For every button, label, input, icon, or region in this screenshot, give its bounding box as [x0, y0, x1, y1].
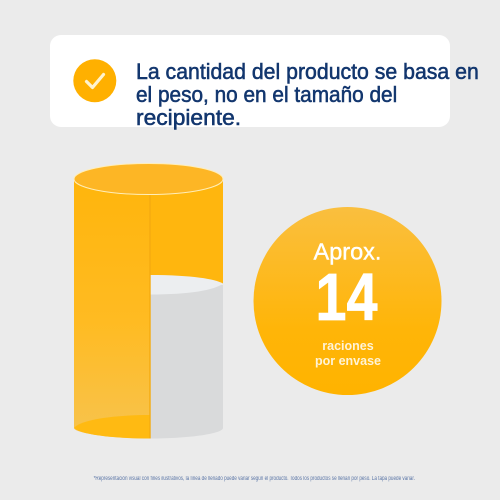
heading: weight statement: La cantidad del producto se basa en — [136, 59, 479, 84]
cylinder: gray product level — [150, 275, 223, 438]
cylinder: top lid — [74, 164, 223, 194]
label: approx: Aprox. — [314, 238, 381, 264]
heading: weight statement: recipiente. — [136, 105, 241, 130]
cylinder: center seam — [149, 194, 151, 438]
heading: weight statement — [136, 59, 479, 130]
label: per container: por envase — [315, 354, 381, 368]
cylinder: base ellipse — [74, 415, 150, 438]
footnote: *Representación visual con fines ilustrativos, la línea de llenado puede variar según el producto. Todos los productos se llenan por peso. La tapa puede variar. — [94, 476, 415, 482]
label: servings: raciones — [322, 339, 374, 353]
stat badge: servings per container — [254, 207, 442, 395]
heading: weight statement: el peso, no en el tamaño del — [136, 82, 397, 107]
cylinder: upper right yellow wall — [150, 180, 223, 284]
chart: cylinder fill illustration — [74, 164, 223, 438]
panel: message card — [50, 35, 450, 127]
icon: check mark badge — [73, 59, 116, 102]
number: 14: 14 — [316, 260, 378, 335]
cylinder: left yellow wall — [74, 180, 150, 438]
